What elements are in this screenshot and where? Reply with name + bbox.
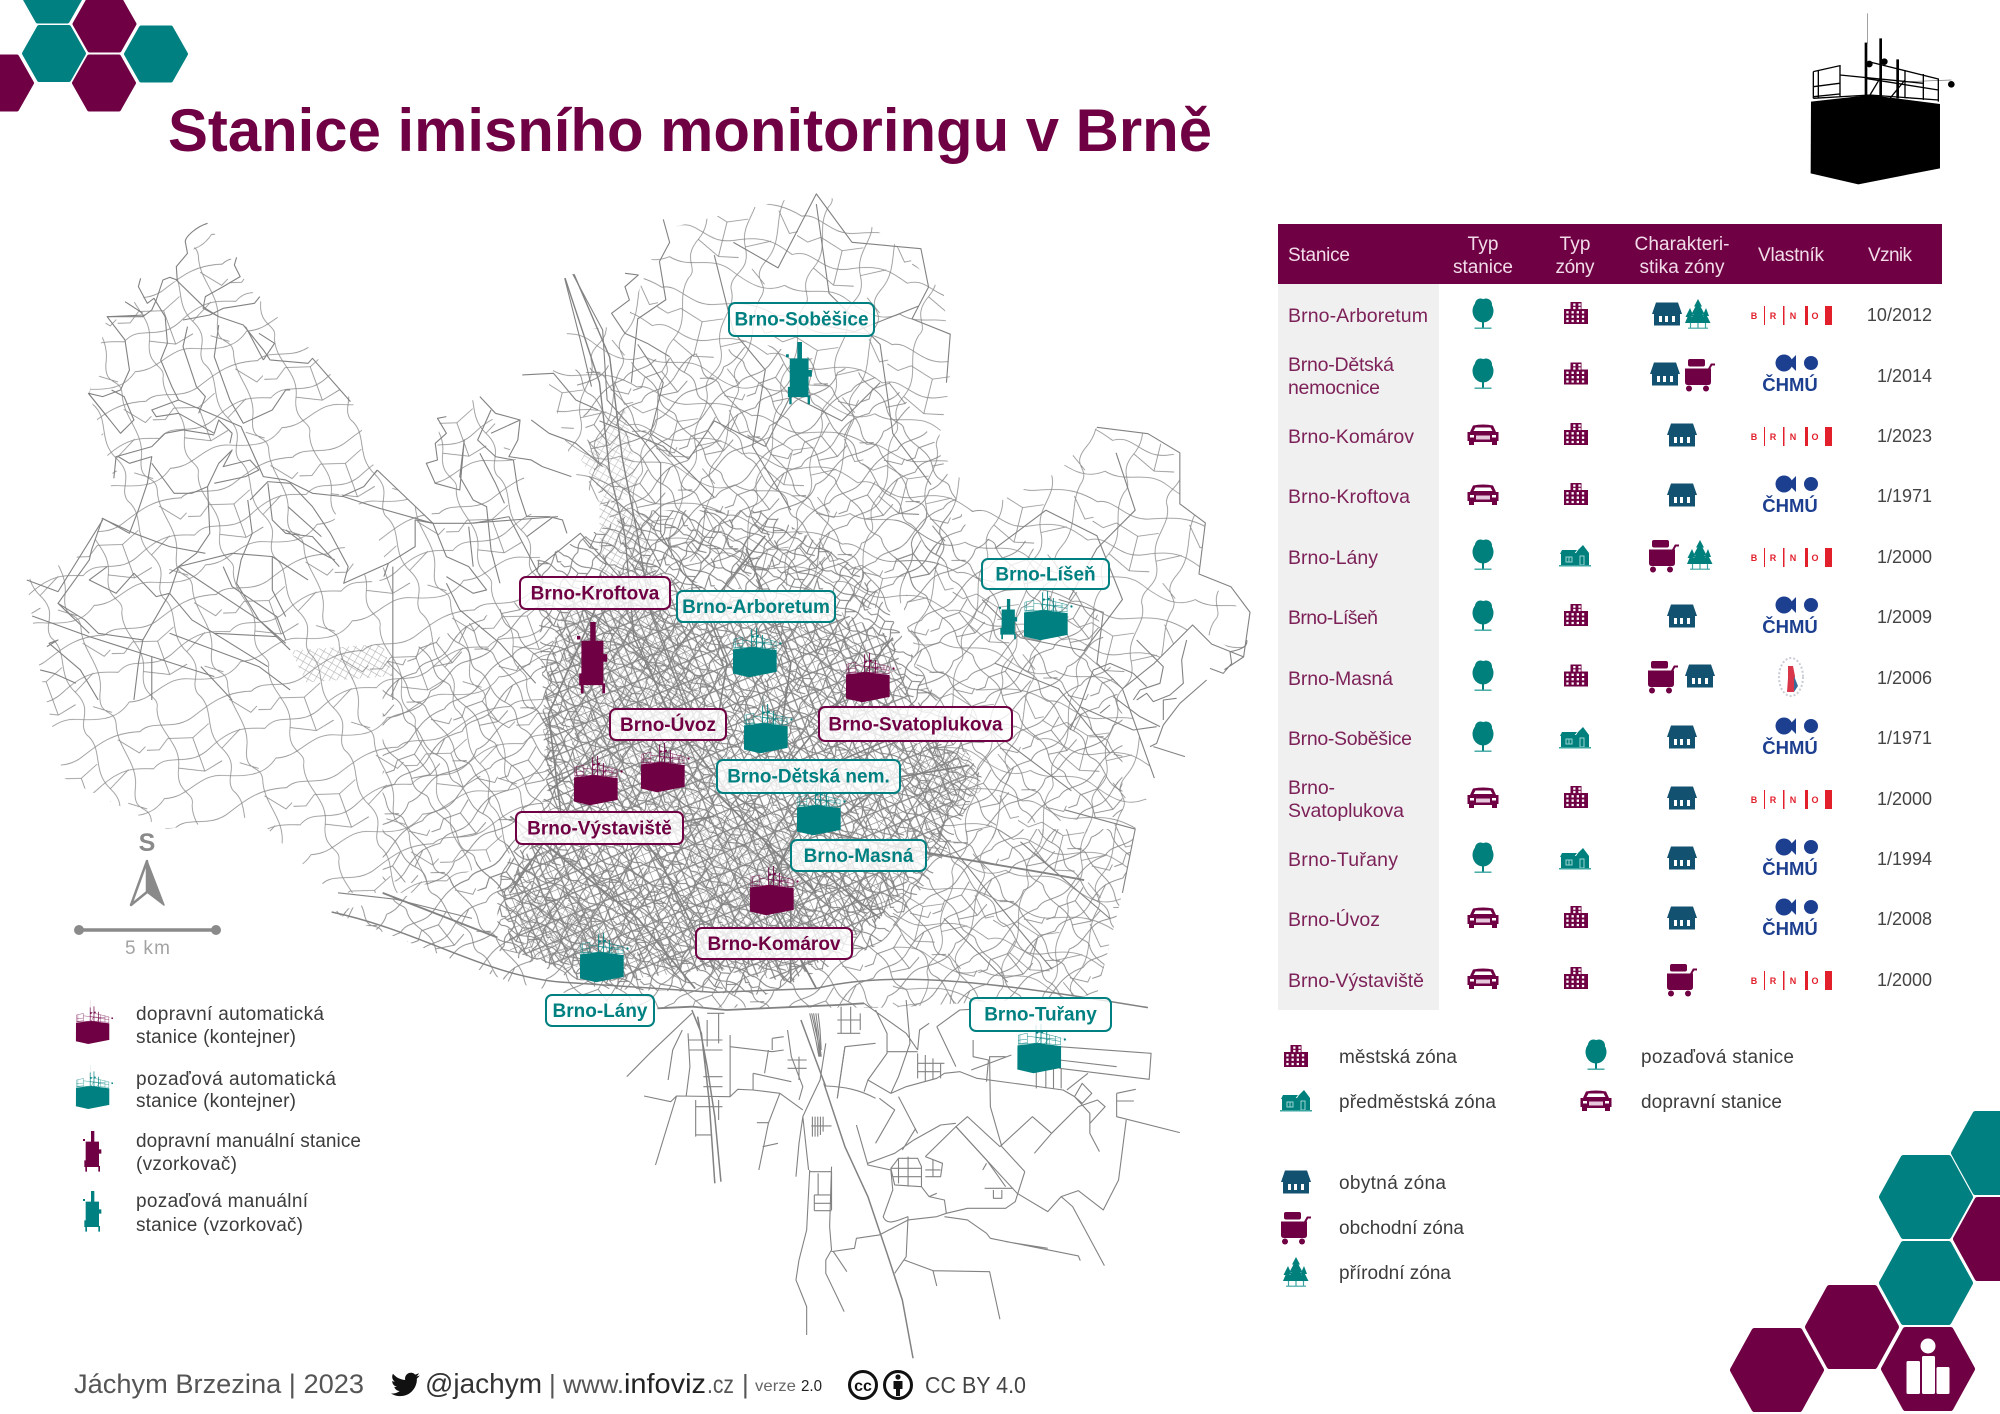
label: Kroftova bbox=[520, 577, 670, 609]
southern roads bbox=[627, 1000, 1180, 1358]
owner: BRNO: R bbox=[1770, 553, 1777, 563]
icon: twitter bird bbox=[391, 1373, 420, 1396]
legend: residential zone bbox=[1281, 1170, 1446, 1194]
legend: suburban zone: předměstská zóna bbox=[1339, 1092, 1496, 1113]
footer: handle and website: @jachym bbox=[425, 1368, 542, 1399]
icon: Creative Commons licence bbox=[850, 1372, 1026, 1398]
station: Líšeň sampler bbox=[999, 599, 1017, 639]
station: Dětská nemocnice upper bbox=[744, 696, 793, 753]
decoration: hexagons top left bbox=[0, 0, 186, 110]
station: Svatoplukova bbox=[846, 645, 895, 702]
legend text: background automatic station: stanice (kontejner) bbox=[136, 1091, 296, 1112]
owner: ČHMÚ bbox=[1762, 476, 1818, 516]
station labels on map bbox=[516, 303, 1111, 1031]
icon: infoviz logo person and bars bbox=[1906, 1338, 1950, 1394]
row: Brno-Dětská nemocnice: 1/2014 bbox=[1877, 366, 1932, 386]
row: Brno-Úvoz bbox=[1288, 898, 1932, 939]
row: Brno-Masná: Brno-Masná bbox=[1288, 668, 1393, 690]
owner: BRNO: B bbox=[1751, 976, 1758, 986]
decoration: hexagons bottom right bbox=[1733, 1114, 2000, 1409]
label: Výstaviště bbox=[516, 812, 683, 844]
owner: BRNO: N bbox=[1790, 976, 1796, 986]
owner: BRNO bbox=[1751, 427, 1832, 446]
title: Stanice imisního monitoringu v Brně bbox=[168, 97, 1212, 164]
legend: zone and station icons bbox=[1280, 1040, 1794, 1286]
legend: suburban zone bbox=[1280, 1090, 1496, 1113]
label: Svatoplukova: Brno-Svatoplukova bbox=[828, 714, 1003, 736]
owner: ČHMÚ bbox=[1762, 596, 1818, 637]
label: Arboretum bbox=[677, 591, 835, 622]
owner: ČHMÚ bbox=[1762, 838, 1818, 879]
row: Brno-Dětská nemocnice: nemocnice bbox=[1288, 377, 1380, 399]
owner: BRNO: B bbox=[1751, 795, 1758, 805]
north arrow: S bbox=[139, 829, 155, 857]
icon: black monitoring station container top right bbox=[1811, 13, 1955, 184]
row: Brno-Výstaviště: 1/2000 bbox=[1877, 970, 1932, 990]
label: Líšeň bbox=[982, 559, 1109, 589]
owner: BRNO: N bbox=[1790, 553, 1796, 563]
legend: commercial zone: obchodní zóna bbox=[1339, 1218, 1464, 1239]
label: Kroftova: Brno-Kroftova bbox=[531, 584, 660, 604]
owner: BRNO: B bbox=[1751, 553, 1758, 563]
label: Úvoz: Brno-Úvoz bbox=[620, 714, 716, 736]
label: Soběšice bbox=[729, 303, 874, 336]
label: Soběšice: Brno-Soběšice bbox=[734, 310, 869, 330]
legend: natural zone bbox=[1283, 1257, 1451, 1286]
table header: Stanice bbox=[1288, 245, 1350, 266]
table header: stika zóny bbox=[1640, 257, 1725, 278]
label: Lány: Brno-Lány bbox=[552, 1001, 648, 1022]
station: Výstaviště bbox=[574, 748, 623, 805]
northern, eastern and central major roads bbox=[332, 194, 1250, 1008]
owner: BRNO: B bbox=[1751, 311, 1758, 321]
owner: BRNO bbox=[1751, 548, 1832, 567]
label: Úvoz bbox=[610, 709, 726, 740]
owner: ČHMÚ: ČHMÚ bbox=[1762, 918, 1818, 939]
owner: BRNO: R bbox=[1770, 976, 1777, 986]
owner: ČHMÚ: ČHMÚ bbox=[1762, 616, 1818, 637]
row: Brno-Arboretum: 10/2012 bbox=[1867, 305, 1932, 325]
row: Brno-Kroftova: 1/1971 bbox=[1877, 486, 1932, 506]
legend text: background automatic station: pozaďová automatická bbox=[136, 1069, 336, 1090]
row: Brno-Tuřany: 1/1994 bbox=[1877, 849, 1932, 869]
icon: Creative Commons licence: cc bbox=[854, 1378, 872, 1395]
station: Komárov bbox=[750, 858, 799, 915]
label: Komárov bbox=[696, 928, 852, 959]
label: Lány bbox=[546, 995, 654, 1026]
scale bar: 5 km bbox=[125, 938, 170, 959]
table header: Vlastník bbox=[1758, 245, 1824, 266]
label: Tuřany: Brno-Tuřany bbox=[984, 1004, 1097, 1026]
row: Brno-Svatoplukova: Brno- bbox=[1288, 777, 1335, 799]
owner: ČHMÚ: ČHMÚ bbox=[1762, 858, 1818, 879]
table header: Typ bbox=[1468, 234, 1498, 255]
legend: traffic station: dopravní stanice bbox=[1641, 1092, 1782, 1113]
owner: BRNO bbox=[1751, 971, 1832, 990]
label: Masná: Brno-Masná bbox=[804, 846, 914, 867]
row: Brno-Úvoz: 1/2008 bbox=[1877, 909, 1932, 929]
owner: ČHMÚ bbox=[1762, 898, 1818, 939]
row: Brno-Výstaviště bbox=[1288, 964, 1932, 996]
owner: BRNO: O bbox=[1811, 311, 1819, 321]
legend: urban zone: městská zóna bbox=[1339, 1047, 1457, 1068]
legend: traffic station bbox=[1580, 1090, 1782, 1113]
row: Brno-Líšeň bbox=[1288, 596, 1932, 637]
row: Brno-Tuřany: Brno-Tuřany bbox=[1288, 849, 1398, 871]
row: Brno-Komárov: Brno-Komárov bbox=[1288, 426, 1414, 448]
owner: BRNO: N bbox=[1790, 432, 1796, 442]
legend: natural zone: přírodní zóna bbox=[1339, 1263, 1451, 1284]
owner: BRNO: O bbox=[1811, 795, 1819, 805]
owner: BRNO: R bbox=[1770, 432, 1777, 442]
footer: handle and website: www. bbox=[562, 1371, 624, 1399]
legend icon: background manual station bbox=[83, 1191, 101, 1232]
owner: BRNO: O bbox=[1811, 432, 1819, 442]
legend: commercial zone bbox=[1281, 1212, 1464, 1244]
row: Brno-Výstaviště: Brno-Výstaviště bbox=[1288, 970, 1424, 992]
label: Tuřany bbox=[970, 998, 1111, 1031]
station: Arboretum bbox=[733, 620, 782, 677]
legend text: traffic manual station: (vzorkovač) bbox=[136, 1154, 237, 1175]
footer: handle and website: | bbox=[742, 1369, 749, 1399]
owner: ČHMÚ bbox=[1762, 718, 1818, 758]
owner: BRNO: O bbox=[1811, 553, 1819, 563]
station: Lány bbox=[580, 925, 629, 982]
row: Brno-Svatoplukova bbox=[1288, 777, 1932, 822]
row: Brno-Úvoz: Brno-Úvoz bbox=[1288, 908, 1380, 931]
eastern edge roads bbox=[1070, 640, 1247, 757]
road map of Brno bbox=[27, 191, 1250, 1358]
row: Brno-Tuřany bbox=[1288, 838, 1932, 879]
label: Dětská nemocnice: Brno-Dětská nem. bbox=[727, 766, 890, 788]
station: Líšeň container bbox=[1024, 583, 1073, 640]
row: Brno-Arboretum: Brno-Arboretum bbox=[1288, 305, 1428, 327]
footer: handle and website: .cz bbox=[707, 1371, 734, 1399]
footer: author: Jáchym Brzezina | 2023 bbox=[74, 1369, 364, 1399]
label: Dětská nemocnice bbox=[717, 760, 900, 793]
footer: handle and website: verze bbox=[755, 1378, 796, 1395]
footer: handle and website bbox=[425, 1368, 822, 1399]
row: Brno-Dětská nemocnice bbox=[1288, 354, 1932, 399]
footer: handle and website: 2.0 bbox=[801, 1378, 822, 1395]
footer: handle and website: infoviz bbox=[624, 1368, 706, 1399]
owner: BRNO: N bbox=[1790, 795, 1796, 805]
row: Brno-Lány: Brno-Lány bbox=[1288, 547, 1378, 569]
row: Brno-Komárov bbox=[1288, 423, 1932, 448]
label: Arboretum: Brno-Arboretum bbox=[682, 597, 830, 618]
row: Brno-Líšeň: Brno-Líšeň bbox=[1288, 607, 1378, 629]
legend text: traffic manual station: dopravní manuální stanice bbox=[136, 1131, 361, 1152]
label: Svatoplukova bbox=[819, 707, 1012, 741]
station: Kroftova sampler bbox=[577, 622, 607, 693]
station markers on map bbox=[574, 342, 1073, 1073]
owner: BRNO: R bbox=[1770, 311, 1777, 321]
legend icon: background automatic station bbox=[76, 1065, 113, 1109]
table header: Typ bbox=[1560, 234, 1590, 255]
legend: background station bbox=[1586, 1040, 1794, 1070]
table header: Charakteri- bbox=[1634, 234, 1730, 255]
label: Masná bbox=[791, 840, 926, 871]
table header bbox=[1278, 224, 1942, 284]
station: Úvoz bbox=[641, 735, 690, 792]
label: Líšeň: Brno-Líšeň bbox=[995, 564, 1096, 586]
owner: ČHMÚ: ČHMÚ bbox=[1762, 495, 1818, 516]
legend: station types bbox=[76, 1000, 361, 1236]
station: Masná bbox=[797, 778, 846, 835]
row: Brno-Soběšice: 1/1971 bbox=[1877, 728, 1932, 748]
owner: ČHMÚ bbox=[1762, 354, 1818, 395]
legend icon: traffic automatic station bbox=[76, 1000, 113, 1044]
owner: BRNO: B bbox=[1751, 432, 1758, 442]
west roads bbox=[27, 223, 700, 700]
scale bar bbox=[74, 925, 221, 959]
row: Brno-Arboretum bbox=[1288, 298, 1932, 329]
row: Brno-Svatoplukova: 1/2000 bbox=[1877, 789, 1932, 809]
owner: BRNO bbox=[1751, 790, 1832, 809]
row: Brno-Soběšice: Brno-Soběšice bbox=[1288, 728, 1412, 750]
label: Výstaviště: Brno-Výstaviště bbox=[527, 818, 672, 840]
table of stations bbox=[1278, 224, 1942, 1010]
first column background bbox=[1278, 284, 1439, 1010]
owner: ČHMÚ: ČHMÚ bbox=[1762, 737, 1818, 758]
station: Soběšice sampler bbox=[786, 342, 812, 404]
row: Brno-Kroftova: Brno-Kroftova bbox=[1288, 486, 1410, 508]
row: Brno-Kroftova bbox=[1288, 476, 1932, 516]
legend: residential zone: obytná zóna bbox=[1339, 1173, 1446, 1194]
north arrow bbox=[131, 829, 164, 905]
legend: background station: pozaďová stanice bbox=[1641, 1047, 1794, 1068]
legend icon: traffic manual station bbox=[83, 1131, 101, 1172]
icon: Creative Commons licence: CC BY 4.0 bbox=[925, 1372, 1026, 1398]
row: Brno-Svatoplukova: Svatoplukova bbox=[1288, 800, 1404, 822]
row: Brno-Lány bbox=[1288, 540, 1932, 572]
table header: stanice bbox=[1453, 257, 1513, 278]
owner: Masná medallion bbox=[1779, 658, 1803, 696]
legend text: traffic automatic station: dopravní automatická bbox=[136, 1004, 324, 1025]
row: Brno-Lány: 1/2000 bbox=[1877, 547, 1932, 567]
label: Komárov: Brno-Komárov bbox=[707, 934, 841, 955]
owner: BRNO: O bbox=[1811, 976, 1819, 986]
owner: BRNO: R bbox=[1770, 795, 1777, 805]
owner: ČHMÚ: ČHMÚ bbox=[1762, 374, 1818, 395]
station: Tuřany bbox=[1017, 1016, 1066, 1073]
legend text: background manual station: pozaďová manuální bbox=[136, 1191, 309, 1212]
owner: BRNO: N bbox=[1790, 311, 1796, 321]
row: Brno-Líšeň: 1/2009 bbox=[1877, 607, 1932, 627]
legend text: traffic automatic station: stanice (kontejner) bbox=[136, 1027, 296, 1048]
footer: handle and website: | bbox=[549, 1369, 556, 1399]
legend text: background manual station: stanice (vzorkovač) bbox=[136, 1215, 303, 1236]
legend: urban zone bbox=[1284, 1045, 1457, 1068]
owner: BRNO bbox=[1751, 306, 1832, 325]
row: Brno-Dětská nemocnice: Brno-Dětská bbox=[1288, 354, 1394, 376]
table header: zóny bbox=[1556, 257, 1595, 278]
table header: Vznik bbox=[1868, 245, 1912, 266]
row: Brno-Masná: 1/2006 bbox=[1877, 668, 1932, 688]
row: Brno-Soběšice bbox=[1288, 718, 1932, 758]
row: Brno-Masná bbox=[1288, 658, 1932, 696]
row: Brno-Komárov: 1/2023 bbox=[1877, 426, 1932, 446]
